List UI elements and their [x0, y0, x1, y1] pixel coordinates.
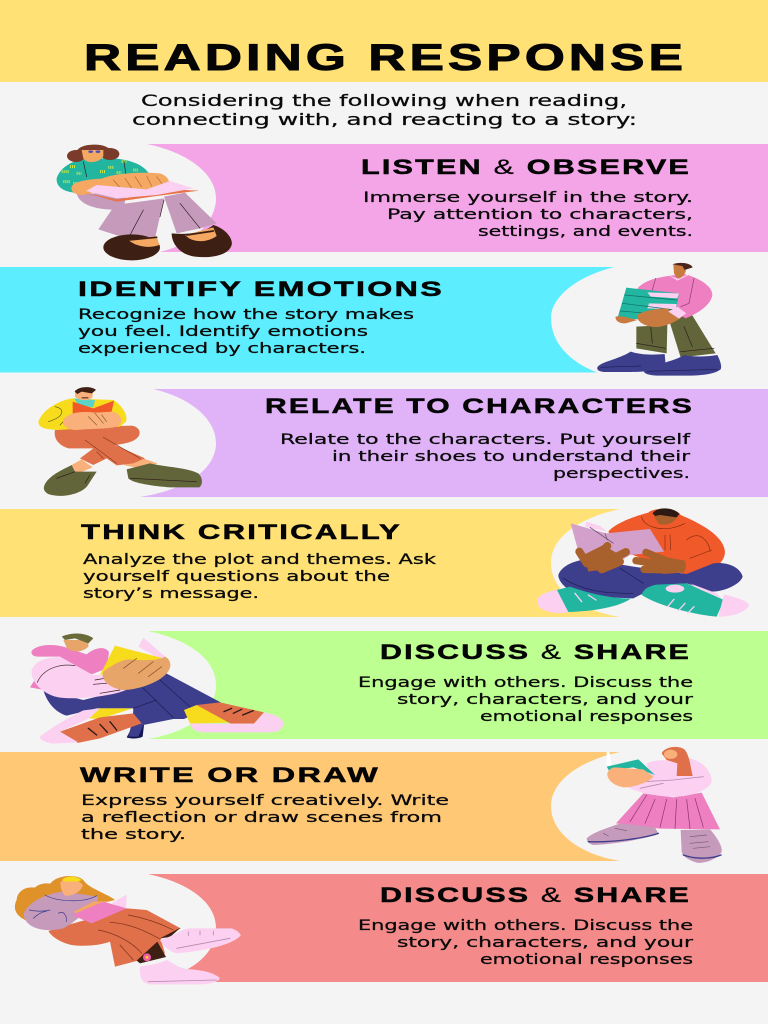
panel: listen and observe	[147, 144, 768, 252]
panel: think critically	[0, 509, 620, 617]
intro text	[132, 91, 637, 129]
panel: discuss and share (green): emotional responses	[480, 709, 693, 725]
title banner	[0, 0, 768, 82]
intro text: connecting with, and reacting to a story:	[132, 110, 637, 129]
panel: discuss and share (red): emotional responses	[480, 952, 693, 968]
panel: think critically: Analyze the plot and themes. Ask	[83, 552, 437, 568]
panel: identify emotions: you feel. Identify emotions	[78, 324, 368, 340]
panel: identify emotions	[0, 267, 614, 372]
panel: identify emotions: Recognize how the story makes	[78, 307, 414, 323]
panel: relate to characters: RELATE TO CHARACTERS	[265, 395, 694, 418]
icon: woman in teal shirt reading	[57, 145, 232, 260]
panel: discuss and share (green): DISCUSS & SHARE	[380, 641, 691, 664]
panel: discuss and share (red): DISCUSS & SHARE	[380, 884, 691, 907]
panel: discuss and share (red)	[148, 874, 768, 982]
panel: listen and observe: settings, and events.	[478, 224, 693, 240]
panel: think critically: story’s message.	[83, 586, 259, 602]
panel: listen and observe: Immerse yourself in the story.	[363, 190, 693, 206]
panel: think critically: THINK CRITICALLY	[81, 521, 402, 544]
panel: write or draw: Express yourself creatively. Write	[81, 793, 449, 809]
icon: person in pink and navy reading yellow book	[30, 633, 283, 744]
panel: identify emotions: IDENTIFY EMOTIONS	[78, 278, 444, 301]
icon: person in headscarf and pink skirt	[587, 747, 722, 863]
panel: listen and observe: Pay attention to characters,	[387, 207, 693, 223]
intro text: Considering the following when reading,	[141, 91, 627, 110]
panel: relate to characters: perspectives.	[553, 466, 690, 482]
panel: think critically: yourself questions about the	[83, 569, 390, 585]
panel: discuss and share (green): story, characters, and your	[397, 692, 693, 708]
icon: man in yellow sweater crossing legs	[38, 387, 202, 496]
panel: discuss and share (red): Engage with others. Discuss the	[358, 918, 693, 934]
title banner: READING RESPONSE	[84, 37, 687, 78]
panel: listen and observe: LISTEN & OBSERVE	[361, 156, 691, 179]
panel: discuss and share (red): story, characters, and your	[397, 935, 693, 951]
panel: write or draw: the story.	[81, 827, 186, 843]
panel: discuss and share (green)	[148, 631, 768, 739]
panel: discuss and share (green): Engage with others. Discuss the	[358, 675, 693, 691]
icon: man in orange hoodie with book	[537, 508, 749, 617]
icon: woman with long hair and orange skirt	[15, 876, 241, 984]
panel: write or draw: a reflection or draw scenes from	[81, 810, 442, 826]
panel: relate to characters: Relate to the characters. Put yourself	[280, 432, 692, 448]
panel: write or draw: WRITE OR DRAW	[80, 764, 380, 787]
panel: write or draw	[0, 752, 620, 861]
panel: relate to characters: in their shoes to understand their	[332, 449, 690, 465]
panel: identify emotions: experienced by characters.	[78, 341, 366, 357]
panel: relate to characters	[140, 389, 768, 497]
icon: man in pink shirt holding books	[597, 263, 721, 376]
